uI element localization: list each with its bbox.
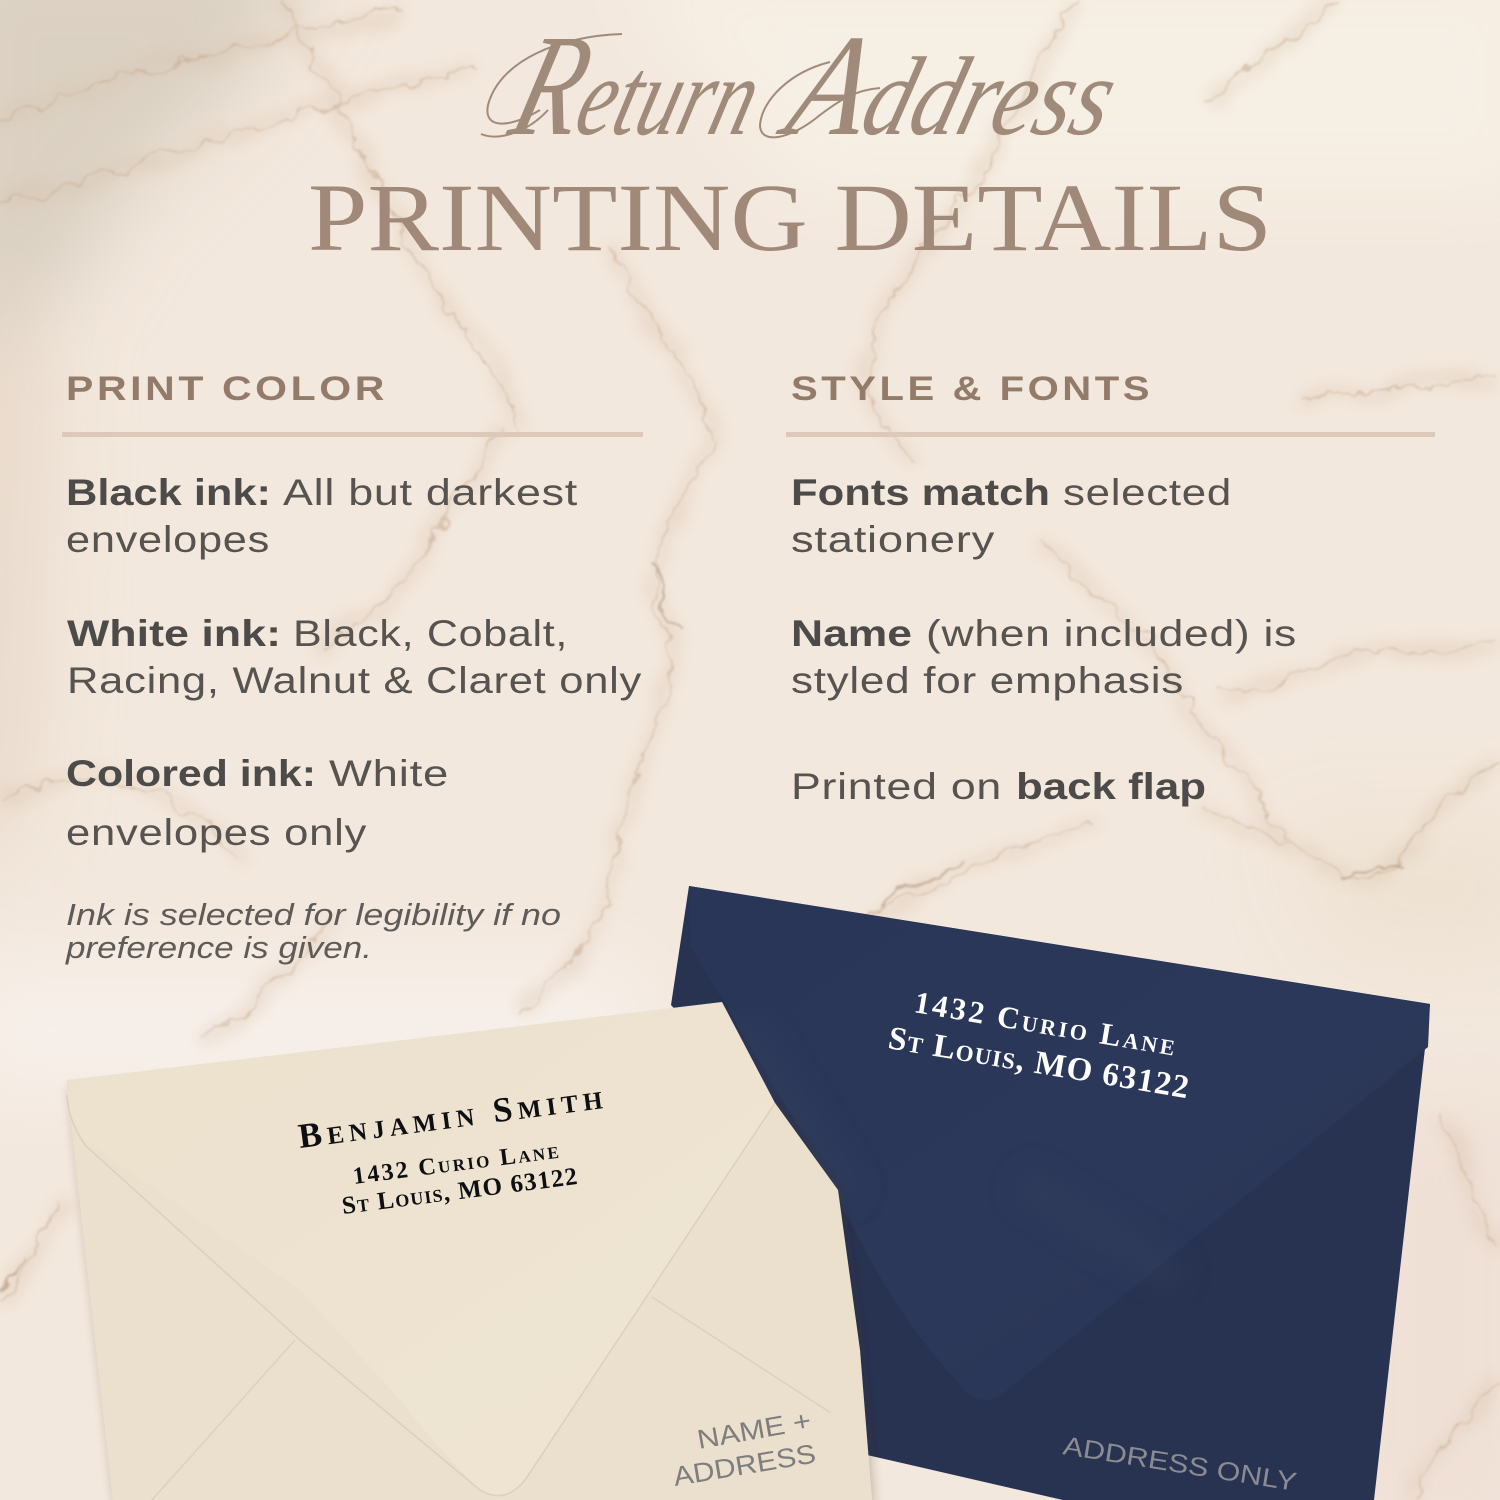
cream envelope address: 1432 Curio Lane (351, 1138, 560, 1190)
text: name: Name (791, 613, 912, 654)
navy envelope address: St Louis, MO 63122 (886, 1020, 1191, 1106)
text: black ink (66, 472, 578, 560)
text: white ink: Racing, Walnut & Claret only (67, 660, 642, 701)
word: Address: Address (765, 6, 1139, 166)
cream envelope address (296, 1077, 605, 1220)
text: name (791, 613, 1297, 701)
text: colored ink: envelopes only (66, 812, 367, 853)
word: Return: Return (496, 6, 783, 166)
text: legibility note (65, 897, 561, 965)
flourish loops (481, 34, 880, 137)
text: back flap: back flap (1016, 766, 1206, 807)
text: black ink: All but darkest (283, 472, 578, 513)
label: name + address: NAME + (695, 1405, 813, 1455)
cream envelope (67, 1002, 872, 1500)
cream envelope flap (67, 1002, 775, 1496)
title: Printing Details: PRINTING DETAILS (308, 164, 1272, 271)
cream envelope body (67, 1085, 872, 1500)
label: name + address: ADDRESS (671, 1439, 818, 1492)
label: address only: ADDRESS ONLY (1061, 1430, 1299, 1497)
text: colored ink: Colored ink: (66, 753, 316, 794)
text: back flap (791, 766, 1206, 807)
text: colored ink: White (329, 753, 449, 794)
text: name: (when included) is (926, 613, 1297, 654)
cream envelope address: Benjamin Smith (296, 1077, 605, 1156)
text: white ink (67, 613, 642, 701)
navy envelope flap (689, 886, 1430, 1400)
text: fonts match: selected (1063, 472, 1232, 513)
label: name + address (671, 1405, 818, 1492)
navy envelope (671, 886, 1430, 1500)
text: fonts match: Fonts match (791, 472, 1050, 513)
navy envelope address: 1432 Curio Lane (912, 984, 1178, 1062)
panel: print color (62, 370, 643, 965)
text: name: styled for emphasis (791, 660, 1184, 701)
cream envelope address: St Louis, MO 63122 (340, 1163, 579, 1220)
text: colored ink (66, 753, 449, 853)
text: fonts match (791, 472, 1232, 560)
heading: print color: PRINT COLOR (66, 370, 388, 408)
text: black ink: Black ink: (66, 472, 271, 513)
text: back flap: Printed on (791, 766, 1002, 807)
text: legibility note: preference is given. (65, 930, 372, 965)
panel: style and fonts (786, 370, 1435, 807)
text: white ink: White ink: (67, 613, 281, 654)
text: white ink: Black, Cobalt, (293, 613, 568, 654)
text: fonts match: stationery (791, 519, 995, 560)
navy envelope body (671, 886, 1430, 1500)
text: black ink: envelopes (66, 519, 270, 560)
text: legibility note: Ink is selected for legibility if no (66, 897, 561, 932)
title: Return Address (481, 6, 1139, 166)
heading: style and fonts: STYLE & FONTS (791, 370, 1153, 408)
